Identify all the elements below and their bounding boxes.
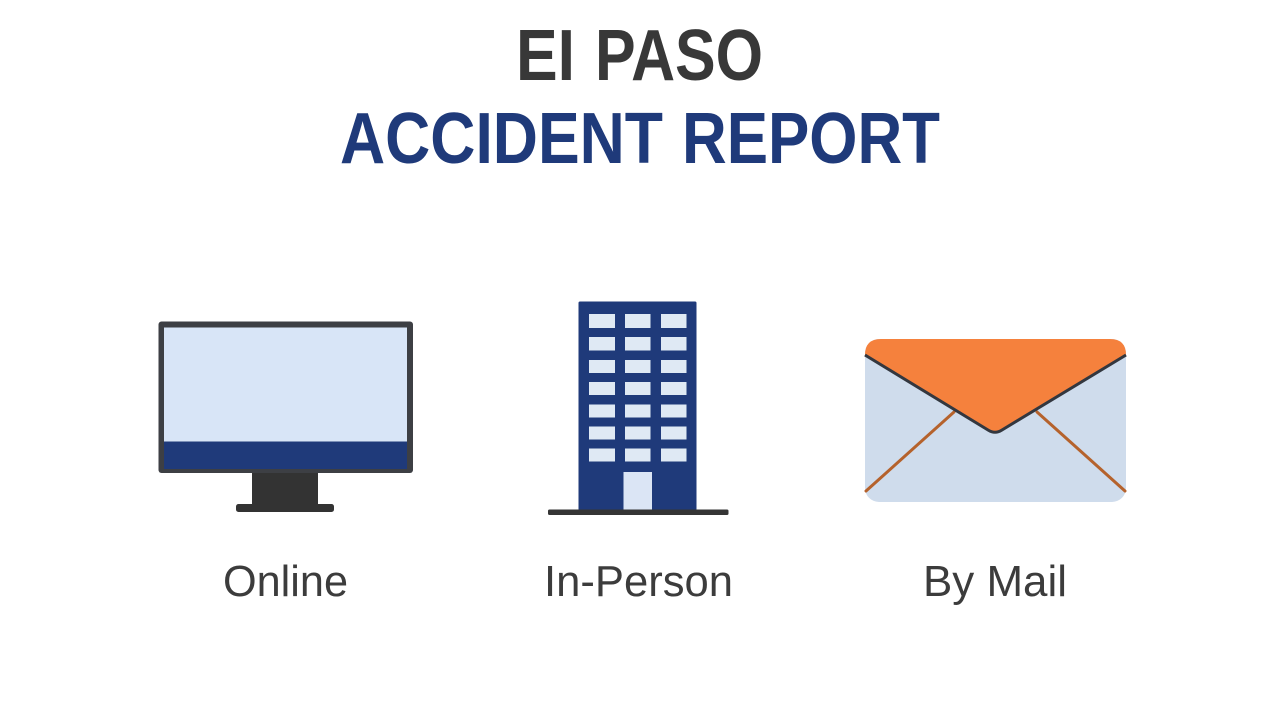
title line 1: [516, 16, 763, 96]
icon: computer monitor: [158, 322, 413, 512]
icon: office building: [548, 302, 728, 515]
title line 2: REPORT: [682, 99, 940, 179]
title line 2: ACCIDENT: [340, 99, 663, 179]
title line 1: EI: [516, 16, 575, 96]
label: Online: Online: [223, 557, 348, 606]
title line 1: PASO: [595, 16, 763, 96]
label: In-Person: In-Person: [544, 557, 733, 606]
icon: envelope: [865, 339, 1126, 502]
title: [340, 16, 940, 179]
label: By Mail: By Mail: [923, 557, 1067, 606]
title line 2: [340, 99, 940, 179]
